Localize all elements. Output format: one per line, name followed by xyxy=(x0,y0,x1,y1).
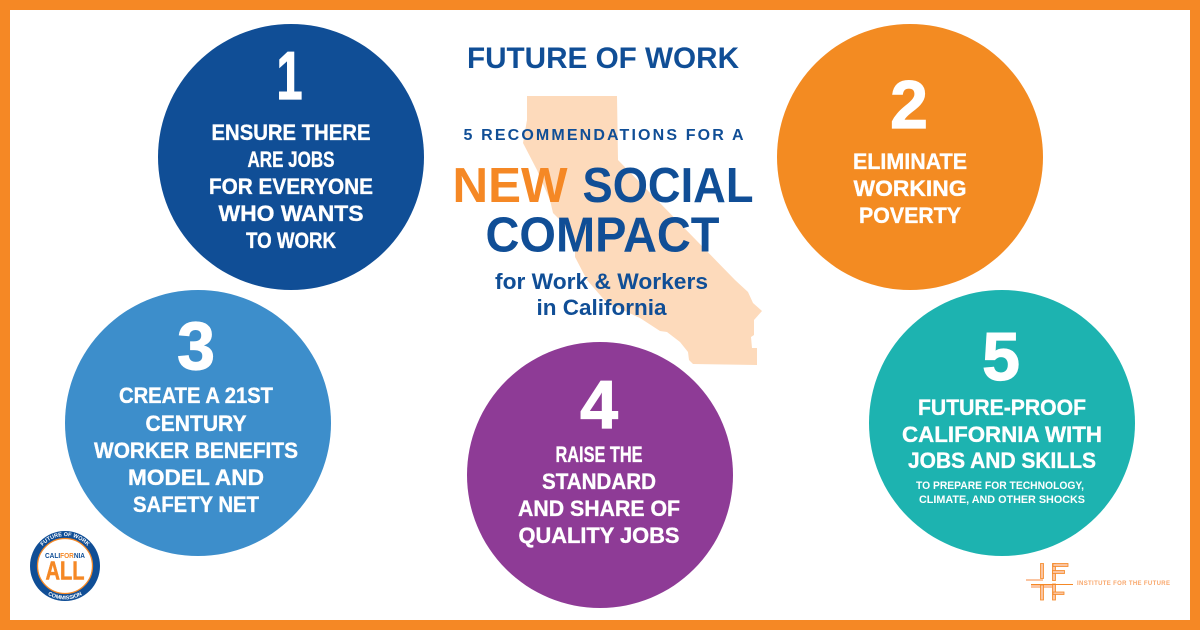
subheading: 5 recommendations: 5 RECOMMENDATIONS FOR A xyxy=(464,127,744,144)
panel: recommendation 4: STANDARD xyxy=(542,469,656,494)
panel: recommendation 1: WHO WANTS xyxy=(218,201,364,226)
logo: california for all xyxy=(30,531,100,601)
headline: compact: COMPACT xyxy=(486,208,720,262)
panel: recommendation 4: QUALITY JOBS xyxy=(518,523,680,548)
logo: california for all: FUTURE OF WORK xyxy=(40,532,90,546)
panel: recommendation 3: SAFETY NET xyxy=(133,492,260,517)
panel: recommendation 2: POVERTY xyxy=(859,203,961,228)
logo: california for all: ALL xyxy=(46,556,85,586)
logo: california for all: COMMISSION xyxy=(48,592,82,600)
panel: recommendation 5: JOBS AND SKILLS xyxy=(908,448,1096,473)
logo: institute for the future: INSTITUTE FOR THE FUTURE xyxy=(1077,581,1170,587)
panel: recommendation 5: TO PREPARE FOR TECHNOLOGY, xyxy=(916,480,1084,492)
panel: recommendation 2: 2 xyxy=(890,67,928,143)
panel: recommendation 5: FUTURE-PROOF xyxy=(918,395,1086,420)
panel: recommendation 5: CLIMATE, AND OTHER SHOCKS xyxy=(919,494,1085,506)
panel: recommendation 1: TO WORK xyxy=(246,228,336,253)
panel: recommendation 3: CENTURY xyxy=(146,411,247,436)
tagline: for Work & Workers xyxy=(495,269,708,294)
tagline xyxy=(495,269,708,320)
panel: recommendation 3: CREATE A 21ST xyxy=(119,383,274,408)
panel: recommendation 4: AND SHARE OF xyxy=(518,496,680,521)
tagline: in California xyxy=(536,295,667,320)
logo: california for all: CALIFORNIA xyxy=(45,551,85,560)
panel: recommendation 3: 3 xyxy=(177,308,215,384)
panel: recommendation 3 xyxy=(65,290,331,556)
panel: recommendation 5: CALIFORNIA WITH xyxy=(902,422,1102,447)
heading: future of work: FUTURE OF WORK xyxy=(467,42,739,75)
panel: recommendation 4 xyxy=(467,342,733,608)
panel: recommendation 2: WORKING xyxy=(854,176,966,201)
headline: new social: SOCIAL xyxy=(582,159,754,213)
california map silhouette xyxy=(523,96,762,365)
panel: recommendation 5: 5 xyxy=(982,319,1020,395)
panel: recommendation 1: FOR EVERYONE xyxy=(209,174,373,199)
panel: recommendation 3: MODEL AND xyxy=(128,465,264,490)
headline: new social: NEW xyxy=(452,159,568,213)
panel: recommendation 1: ENSURE THERE xyxy=(212,120,370,145)
panel: recommendation 5 xyxy=(869,290,1135,556)
headline: new social xyxy=(452,159,754,213)
panel: recommendation 1 xyxy=(158,24,424,290)
panel: recommendation 4: 4 xyxy=(580,367,618,443)
panel: recommendation 4: RAISE THE xyxy=(556,442,642,467)
panel: recommendation 2 xyxy=(777,24,1043,290)
panel: recommendation 3: WORKER BENEFITS xyxy=(94,438,298,463)
panel: recommendation 1: 1 xyxy=(276,38,302,114)
panel: recommendation 2: ELIMINATE xyxy=(853,149,967,174)
panel: recommendation 1: ARE JOBS xyxy=(248,147,334,172)
logo: institute for the future xyxy=(1026,564,1170,600)
